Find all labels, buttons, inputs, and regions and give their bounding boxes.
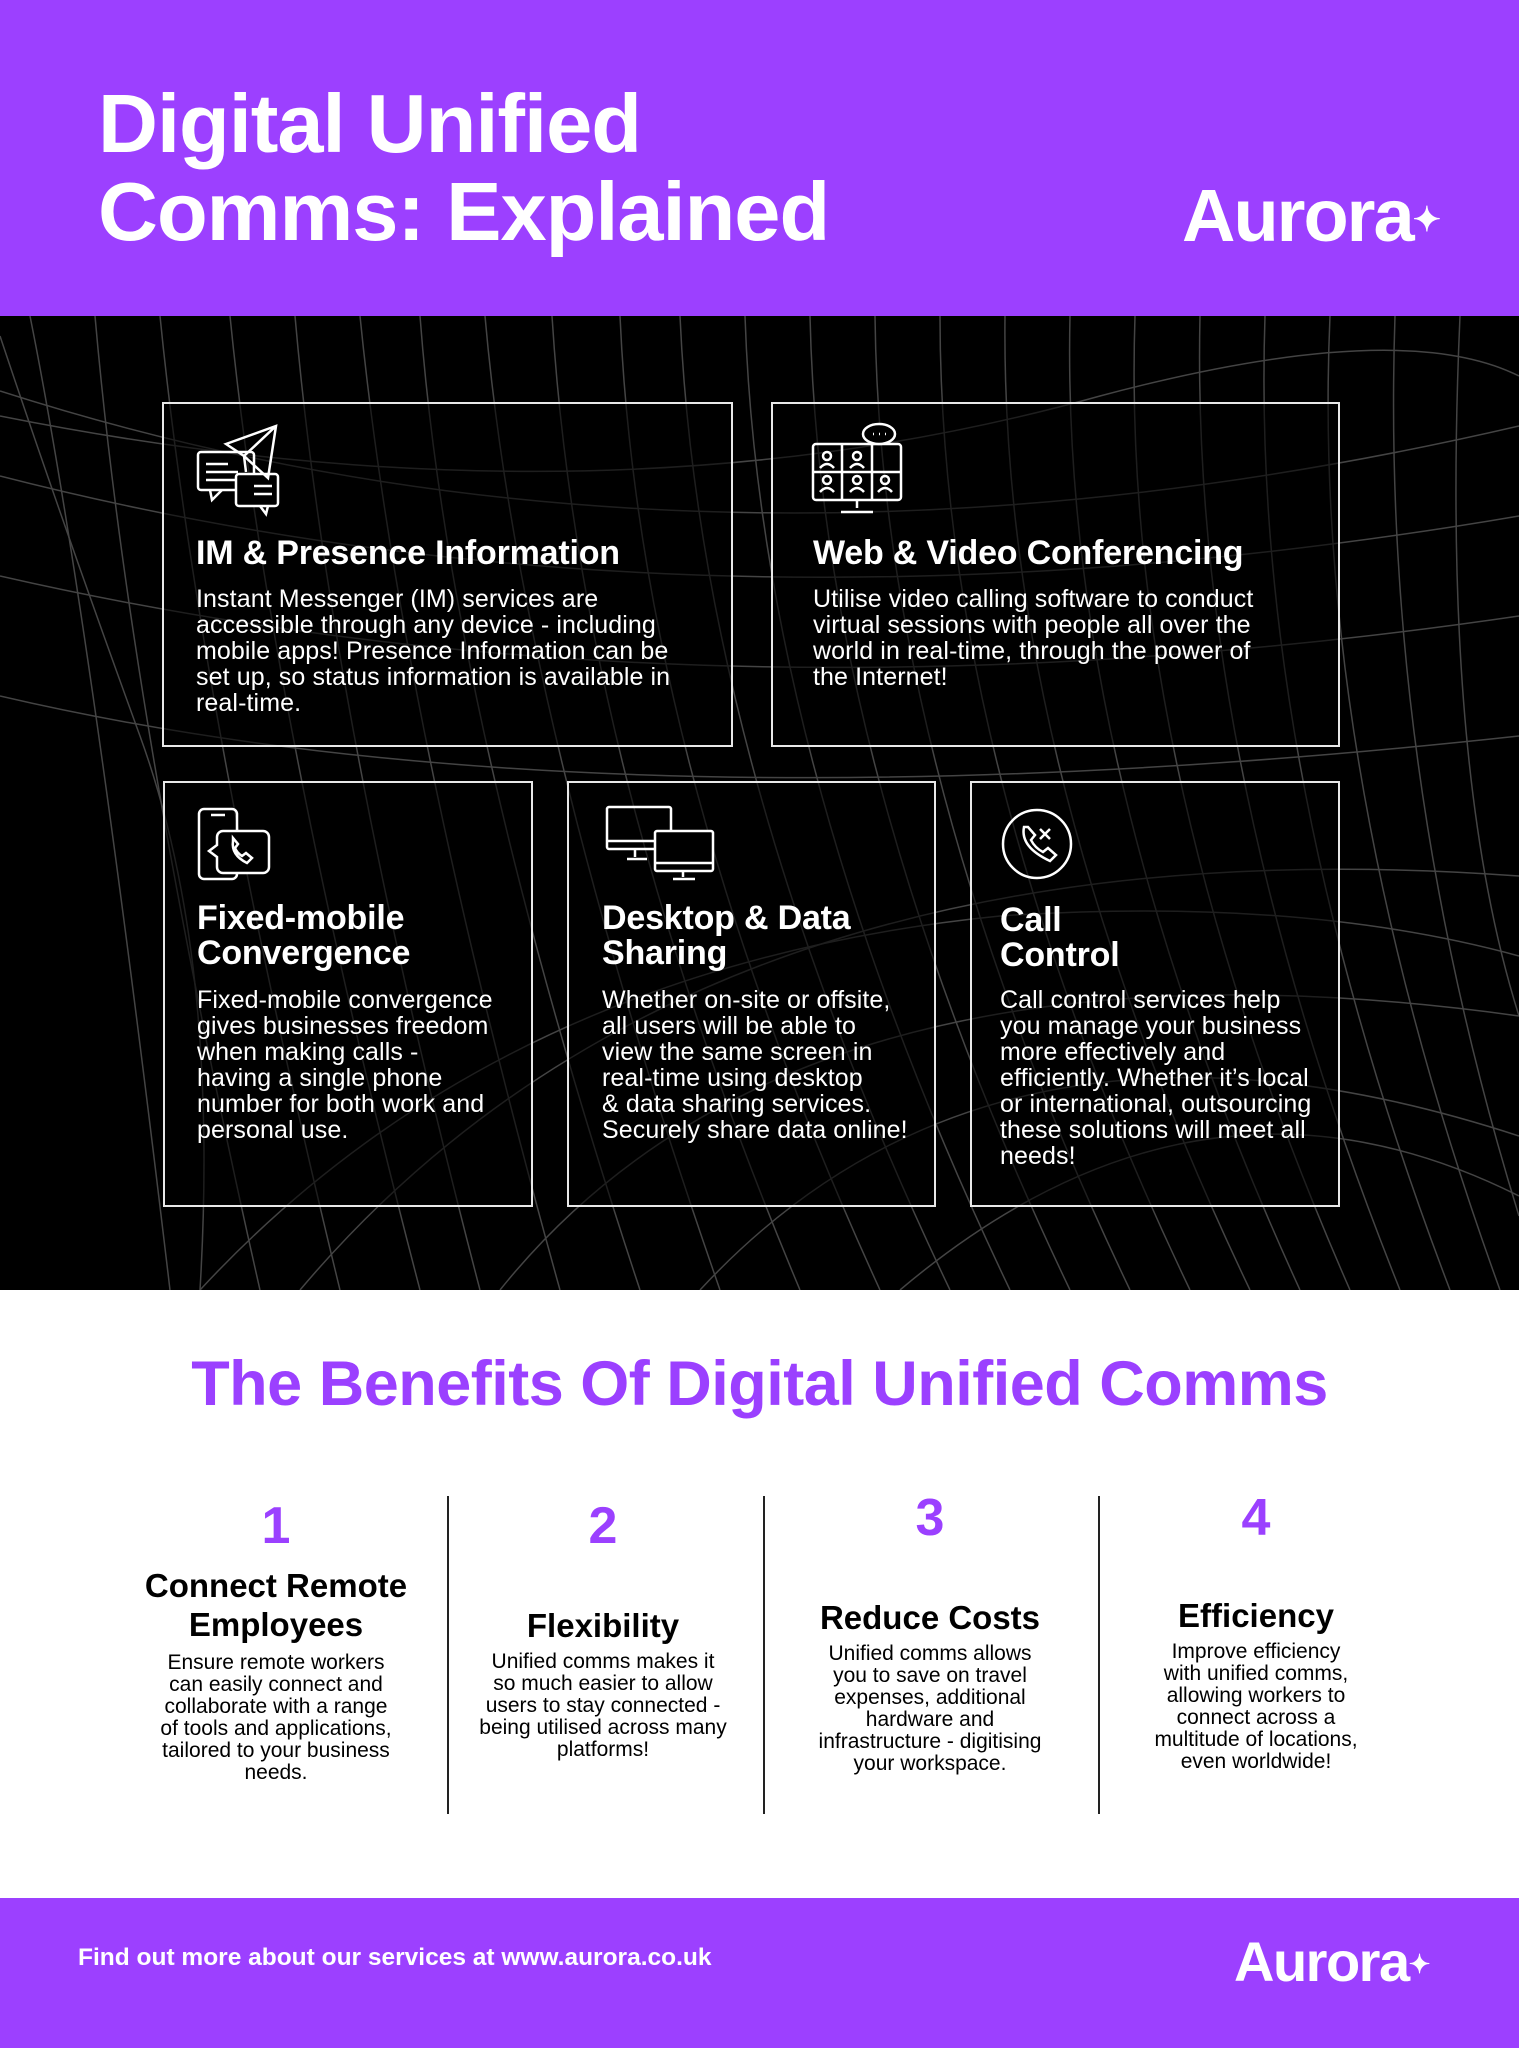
text: set up, so status information is available in xyxy=(196,663,670,691)
text xyxy=(1000,986,1311,1170)
text xyxy=(196,585,670,717)
title xyxy=(98,77,829,258)
heading: IM & Presence Information xyxy=(196,534,620,572)
text: real-time using desktop xyxy=(602,1064,863,1092)
heading: Convergence xyxy=(197,934,410,972)
benefit: Connect Remote Employees: tailored to your business xyxy=(162,1739,390,1762)
text: view the same screen in xyxy=(602,1038,872,1066)
benefit: Flexibility: users to stay connected - xyxy=(486,1694,720,1717)
icon: video conference screen xyxy=(812,422,902,514)
heading xyxy=(197,899,410,972)
text: Instant Messenger (IM) services are xyxy=(196,585,598,613)
benefit: Flexibility: platforms! xyxy=(557,1738,649,1761)
title: Digital Unified xyxy=(98,77,641,170)
footer logo: Aurora✦ xyxy=(1234,1930,1429,1993)
dark services section xyxy=(0,316,1519,1290)
icon: phone with call bubble xyxy=(198,808,270,880)
text: or international, outsourcing xyxy=(1000,1090,1311,1118)
text: having a single phone xyxy=(197,1064,442,1092)
panel: Call Control xyxy=(970,781,1340,1207)
heading: Call xyxy=(1000,901,1062,939)
benefit: Efficiency: multitude of locations, xyxy=(1154,1728,1358,1751)
text: virtual sessions with people all over the xyxy=(813,611,1251,639)
logo: Aurora: Aurora✦ xyxy=(1182,174,1439,257)
text: needs! xyxy=(1000,1142,1076,1170)
icon: two monitors xyxy=(606,806,714,880)
text xyxy=(602,986,908,1144)
text: Whether on-site or offsite, xyxy=(602,986,890,1014)
heading: Control xyxy=(1000,936,1119,974)
heading: Desktop & Data xyxy=(602,899,850,937)
panel: IM & Presence Information xyxy=(162,402,733,747)
icon: chat bubbles with paper plane xyxy=(196,424,280,517)
text: these solutions will meet all xyxy=(1000,1116,1306,1144)
text xyxy=(813,585,1254,691)
benefit: Flexibility: 2 xyxy=(589,1497,617,1555)
text: Utilise video calling software to conduct xyxy=(813,585,1253,613)
benefit: Efficiency: connect across a xyxy=(1177,1706,1335,1729)
text: you manage your business xyxy=(1000,1012,1301,1040)
title: Comms: Explained xyxy=(98,165,829,258)
heading: Fixed-mobile xyxy=(197,899,404,937)
benefit: Efficiency: with unified comms, xyxy=(1164,1662,1348,1685)
benefit: Efficiency: Improve efficiency xyxy=(1172,1640,1340,1663)
text xyxy=(197,986,493,1144)
panel: Desktop & Data Sharing xyxy=(567,781,936,1207)
heading xyxy=(602,899,851,972)
benefit: Efficiency: even worldwide! xyxy=(1181,1750,1331,1773)
text: world in real-time, through the power of xyxy=(813,637,1251,665)
heading: Web & Video Conferencing xyxy=(813,534,1243,572)
text: number for both work and xyxy=(197,1090,484,1118)
footer band xyxy=(0,1898,1519,2048)
benefit: Efficiency: 4 xyxy=(1242,1489,1270,1547)
text: personal use. xyxy=(197,1116,348,1144)
text: all users will be able to xyxy=(602,1012,856,1040)
benefit: Flexibility: so much easier to allow xyxy=(493,1672,713,1695)
text: accessible through any device - including xyxy=(196,611,656,639)
panel: Fixed-mobile Convergence xyxy=(163,781,533,1207)
benefit: Reduce Costs: Reduce Costs xyxy=(820,1599,1040,1636)
heading xyxy=(1000,901,1119,974)
benefit: Reduce Costs: infrastructure - digitising xyxy=(819,1730,1041,1753)
text: the Internet! xyxy=(813,663,948,691)
benefit: Reduce Costs: expenses, additional xyxy=(834,1686,1026,1709)
footer text: Find out more about our services at www.aurora.co.uk xyxy=(78,1944,712,1971)
benefit: Flexibility: being utilised across many xyxy=(479,1716,727,1739)
benefit: Connect Remote Employees: of tools and applications, xyxy=(160,1717,392,1740)
benefit: Connect Remote Employees: Employees xyxy=(189,1606,363,1643)
benefit: Connect Remote Employees: Connect Remote xyxy=(145,1567,407,1604)
benefit: Efficiency xyxy=(1154,1489,1358,1773)
text: Securely share data online! xyxy=(602,1116,908,1144)
benefit: Connect Remote Employees xyxy=(145,1497,407,1784)
benefits heading: The Benefits Of Digital Unified Comms xyxy=(191,1349,1328,1419)
benefit: Flexibility xyxy=(479,1497,727,1761)
text: when making calls - xyxy=(197,1038,418,1066)
benefit: Connect Remote Employees: can easily connect and xyxy=(169,1673,383,1696)
benefit: Connect Remote Employees: collaborate with a range xyxy=(164,1695,387,1718)
text: real-time. xyxy=(196,689,301,717)
benefit: Connect Remote Employees: 1 xyxy=(262,1497,290,1555)
header band xyxy=(0,0,1519,316)
text: Call control services help xyxy=(1000,986,1280,1014)
text: Fixed-mobile convergence xyxy=(197,986,493,1014)
benefit: Efficiency: allowing workers to xyxy=(1167,1684,1345,1707)
panel: Web & Video Conferencing xyxy=(771,402,1340,747)
text: & data sharing services. xyxy=(602,1090,871,1118)
benefit: Flexibility: Unified comms makes it xyxy=(492,1650,714,1673)
benefit: Reduce Costs: you to save on travel xyxy=(833,1664,1027,1687)
benefit: Flexibility: Flexibility xyxy=(527,1607,679,1644)
benefit: Connect Remote Employees: needs. xyxy=(244,1761,308,1784)
text: mobile apps! Presence Information can be xyxy=(196,637,668,665)
background wireframe pattern xyxy=(0,316,1519,1290)
text: efficiently. Whether it’s local xyxy=(1000,1064,1309,1092)
icon: phone in circle xyxy=(1002,808,1072,880)
benefit: Efficiency: Efficiency xyxy=(1178,1597,1334,1634)
benefit: Reduce Costs: your workspace. xyxy=(854,1752,1006,1775)
benefit: Reduce Costs: Unified comms allows xyxy=(828,1642,1032,1665)
benefit: Reduce Costs xyxy=(819,1489,1041,1775)
benefit: Reduce Costs: hardware and xyxy=(866,1708,994,1731)
heading: Sharing xyxy=(602,934,727,972)
benefit: Connect Remote Employees: Ensure remote workers xyxy=(167,1651,385,1674)
text: more effectively and xyxy=(1000,1038,1225,1066)
text: gives businesses freedom xyxy=(197,1012,488,1040)
benefit: Reduce Costs: 3 xyxy=(916,1489,944,1547)
